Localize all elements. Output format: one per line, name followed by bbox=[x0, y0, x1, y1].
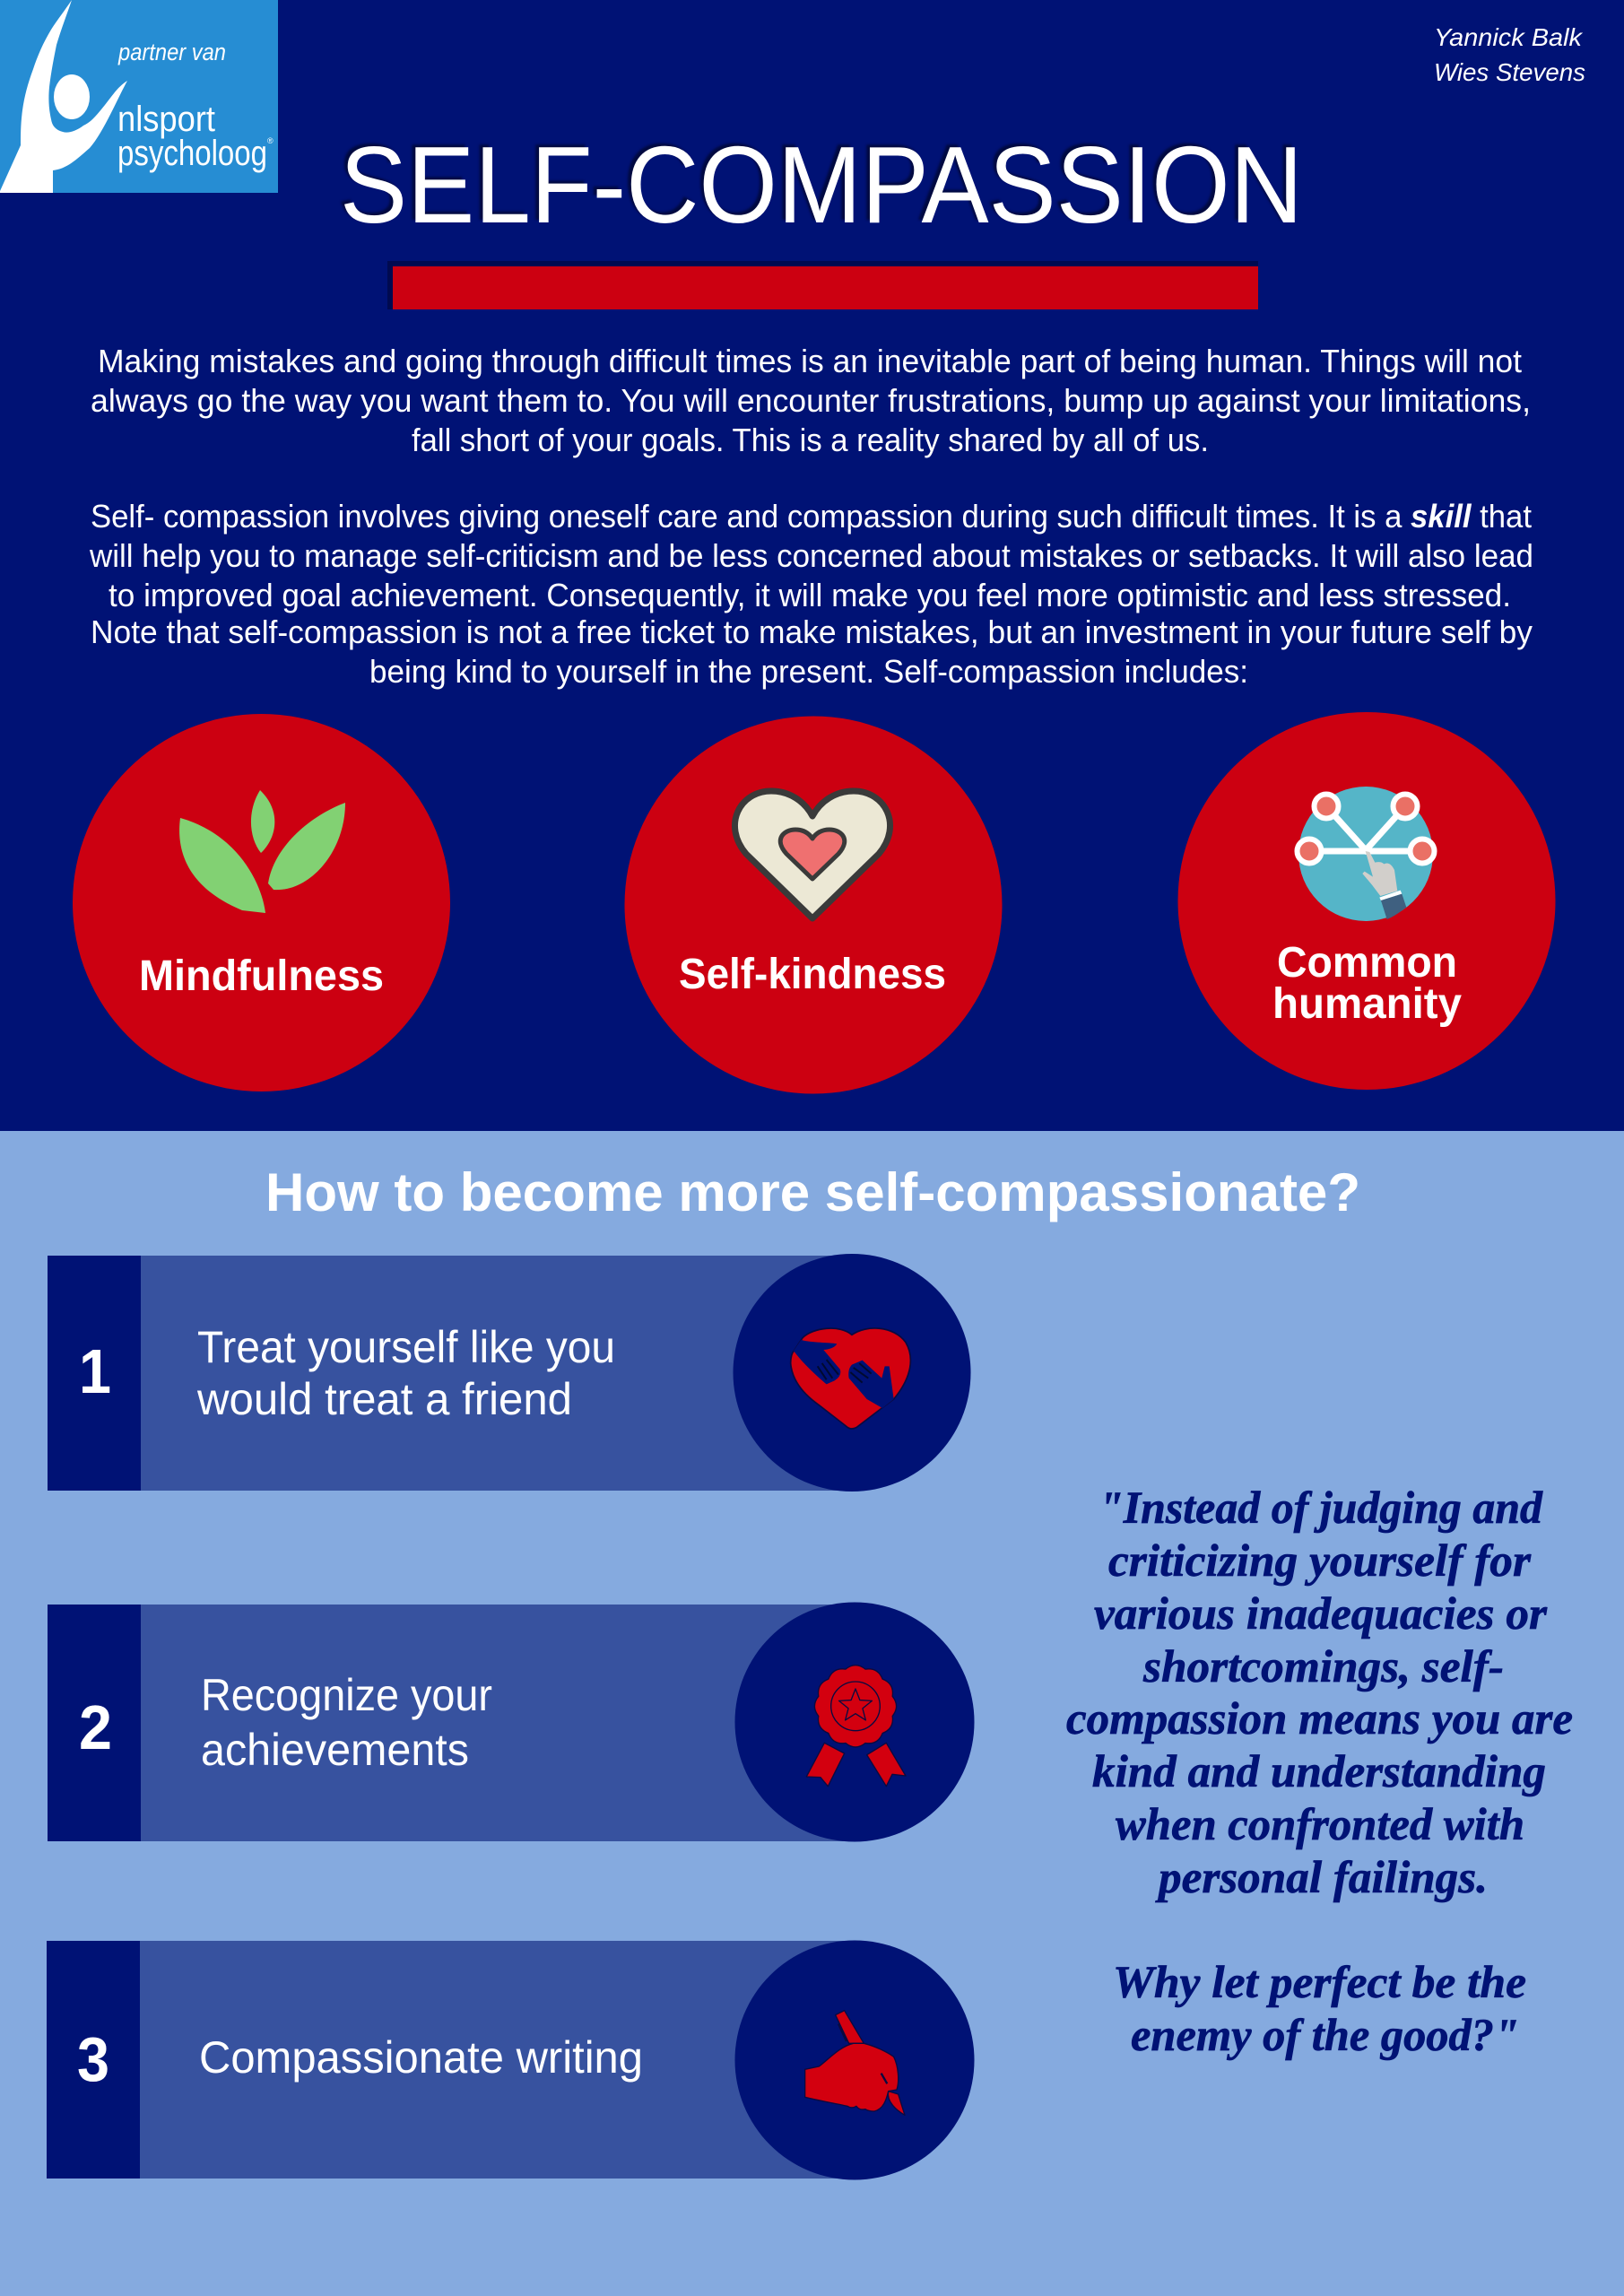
quote: kind and understanding bbox=[1092, 1747, 1546, 1797]
icon: hand writing bbox=[735, 1941, 974, 2179]
logo: nlsport psycholoog bbox=[0, 0, 278, 193]
intro paragraph 1: Making mistakes and going through difficult times is an inevitable part of being human. Things will not bbox=[98, 343, 1522, 379]
label: common humanity bbox=[1272, 939, 1462, 1028]
step 1 bbox=[48, 1254, 970, 1492]
authors bbox=[1434, 23, 1585, 86]
quote: various inadequacies or bbox=[1094, 1589, 1548, 1639]
heading: How to become more self-compassionate? bbox=[265, 1162, 1360, 1222]
step 2 bbox=[48, 1602, 974, 1842]
step 3 bbox=[47, 1941, 974, 2179]
step 1 text: would treat a friend bbox=[196, 1374, 572, 1424]
intro paragraph 1 bbox=[91, 343, 1531, 458]
icon: heart with hands bbox=[734, 1254, 970, 1492]
step 2 text: achievements bbox=[201, 1725, 469, 1775]
circle: mindfulness bbox=[73, 714, 450, 1091]
quote bbox=[1066, 1483, 1573, 2061]
icon: heart bbox=[734, 791, 890, 918]
circle: common humanity bbox=[1178, 712, 1555, 1090]
label: mindfulness: Mindfulness bbox=[139, 952, 384, 1000]
quote: personal failings. bbox=[1155, 1853, 1488, 1903]
step 2 text: Recognize your bbox=[201, 1670, 492, 1720]
intro paragraph 2: Note that self-compassion is not a free ticket to make mistakes, but an investment in your future self by bbox=[91, 613, 1533, 650]
number 1: 1 bbox=[79, 1336, 111, 1406]
icon: network with pointing hand bbox=[1297, 787, 1435, 921]
panel: how to become more self-compassionate bbox=[0, 1131, 1624, 2296]
quote: Why let perfect be the bbox=[1113, 1958, 1526, 2008]
title: SELF-COMPASSION bbox=[340, 124, 1303, 246]
step 3 text: Compassionate writing bbox=[199, 2032, 643, 2083]
authors: Wies Stevens bbox=[1434, 58, 1585, 86]
intro paragraph 1: always go the way you want them to. You will encounter frustrations, bump up against your limitations, bbox=[91, 382, 1531, 419]
quote: "Instead of judging and bbox=[1099, 1483, 1543, 1534]
quote: criticizing yourself for bbox=[1108, 1536, 1532, 1587]
authors: Yannick Balk bbox=[1434, 23, 1584, 51]
step 1 text: Treat yourself like you bbox=[197, 1322, 615, 1372]
intro paragraph 2: being kind to yourself in the present. Self-compassion includes: bbox=[369, 653, 1248, 690]
label: common humanity: humanity bbox=[1272, 980, 1462, 1028]
icon: award rosette bbox=[735, 1602, 974, 1842]
quote: shortcomings, self- bbox=[1142, 1642, 1504, 1692]
step 1 text bbox=[196, 1322, 615, 1424]
logo: nlsport psycholoog: nlsport bbox=[117, 100, 215, 139]
logo: nlsport psycholoog: ® bbox=[267, 136, 274, 145]
title underline bar bbox=[387, 261, 1258, 309]
panel: introduction bbox=[0, 0, 1624, 1131]
label: common humanity: Common bbox=[1277, 939, 1457, 987]
label: self-kindness: Self-kindness bbox=[679, 951, 946, 998]
logo: nlsport psycholoog: partner van bbox=[117, 39, 226, 65]
number 3: 3 bbox=[77, 2024, 109, 2094]
step 2 text bbox=[201, 1670, 492, 1775]
intro paragraph 2 bbox=[89, 498, 1533, 690]
quote: compassion means you are bbox=[1066, 1694, 1573, 1744]
logo: nlsport psycholoog: psycholoog bbox=[117, 134, 267, 173]
intro paragraph 1: fall short of your goals. This is a reality shared by all of us. bbox=[412, 422, 1209, 458]
icon: leaves bbox=[179, 790, 345, 913]
quote: enemy of the good?" bbox=[1131, 2011, 1519, 2061]
quote: when confronted with bbox=[1116, 1800, 1524, 1850]
circle: self-kindness bbox=[624, 716, 1003, 1094]
intro paragraph 2: will help you to manage self-criticism and be less concerned about mistakes or setbacks. It will also lead bbox=[89, 537, 1533, 574]
intro paragraph 2: to improved goal achievement. Consequently, it will make you feel more optimistic and less stressed. bbox=[109, 577, 1511, 613]
intro paragraph 2: Self- compassion involves giving oneself care and compassion during such difficult times. It is a skill that bbox=[91, 498, 1532, 535]
number 2: 2 bbox=[79, 1692, 112, 1762]
